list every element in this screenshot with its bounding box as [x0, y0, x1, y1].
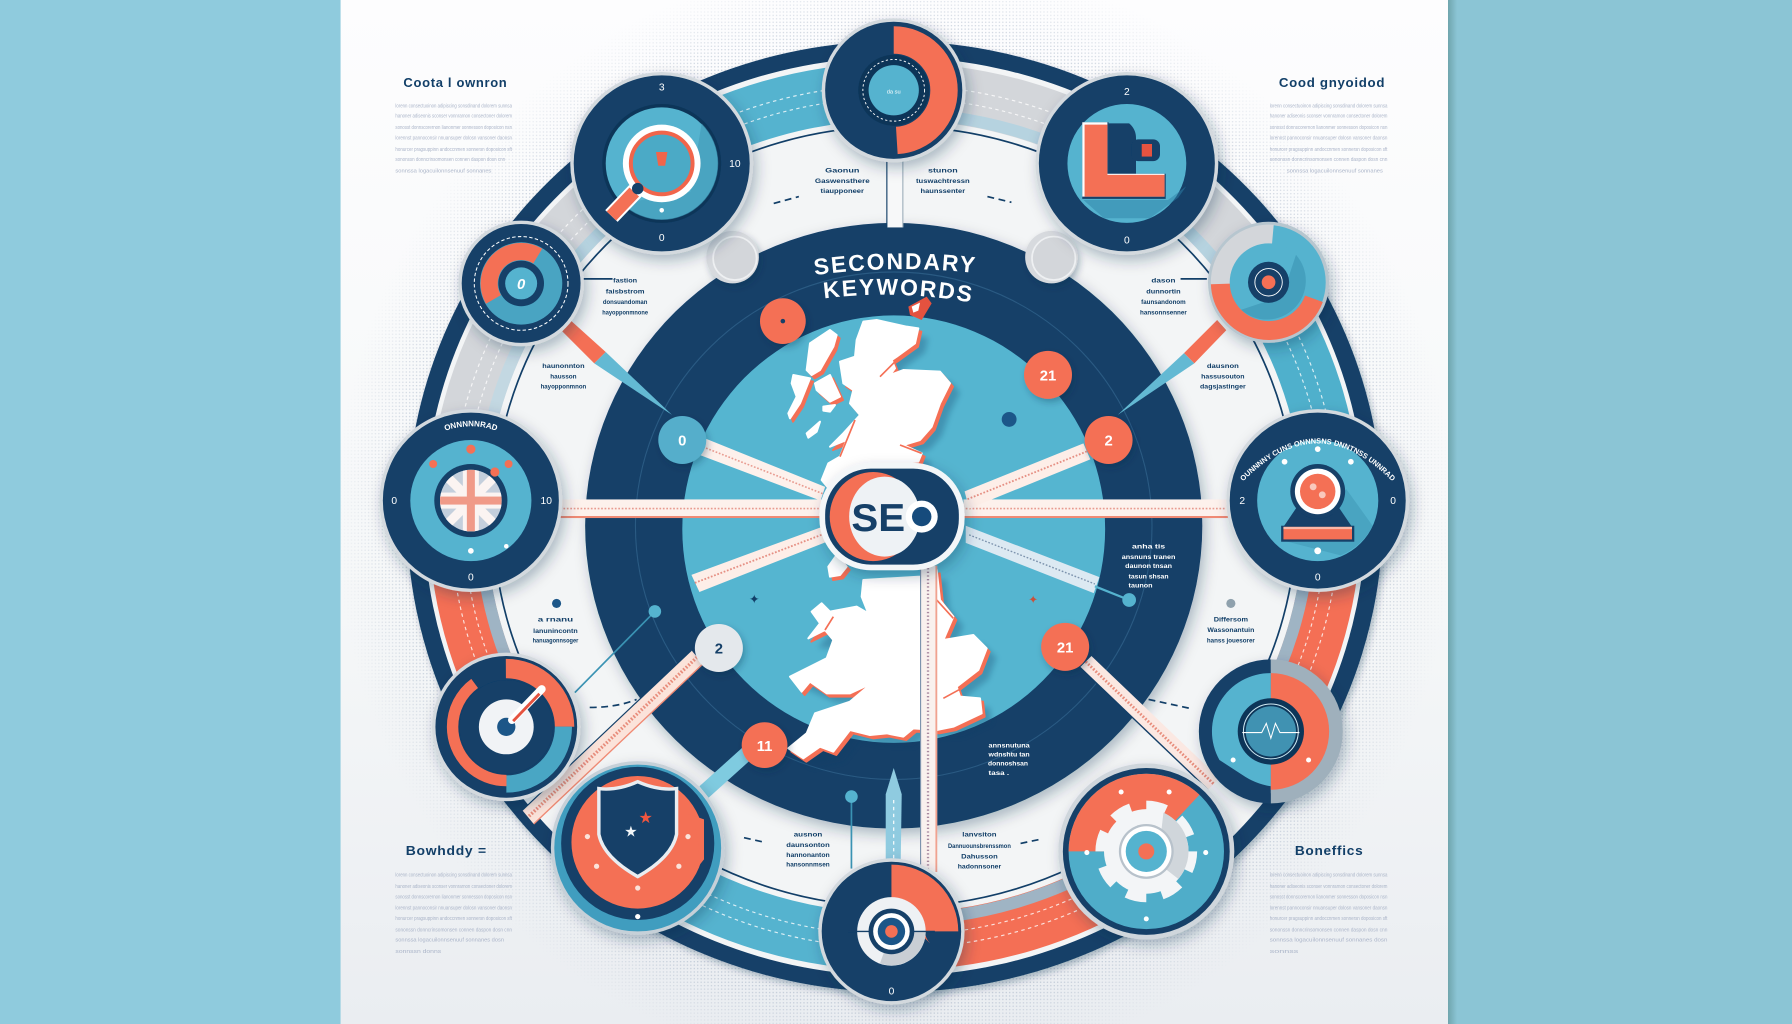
label: left lower: lanunincontn: [533, 628, 578, 635]
icon circle: shield: ★: [639, 808, 653, 827]
label: right lower: hanss jouesorer: [1207, 637, 1255, 644]
label: navy right white text: taunon: [1129, 582, 1153, 589]
label: bottom left: daunsonton: [786, 842, 830, 849]
corner text: top left: lorenn consectuoinon adipiscing sonsdinand dolorem sunnsa: [395, 103, 513, 109]
title: secondary keywords: KEYWORDS: [824, 278, 972, 302]
corner text: bottom right: sonnss: [1270, 949, 1299, 955]
corner text: bottom left: sonnssn donns: [395, 949, 441, 955]
label: left upper 1: donsuandoman: [603, 299, 647, 306]
corner text: top left: sononssn donncrinsomonsen connen daspon dosn cnn: [395, 157, 505, 163]
corner text: bottom left: lorennst pannoconsir nnuansuper dolosn vansoner daonsn: [395, 906, 512, 912]
star: navy: ✦: [749, 591, 760, 606]
right edge shadow: [1448, 0, 1457, 1024]
icon circle: magnifier: 0: [659, 233, 665, 244]
label: navy right white text: daunon tnsan: [1125, 563, 1172, 570]
label: right lower: Differsom: [1214, 617, 1248, 624]
strap: lower-right node to gauge: [1080, 656, 1219, 790]
corner text: top left: lorennst pannoconsir nnuansuper dolosn vansoner daonsn: [395, 135, 512, 141]
label: right upper 2: [1200, 363, 1246, 391]
node: 21 lower: [1041, 623, 1089, 671]
icon circle: small right dial: [1207, 221, 1330, 344]
label: bottom right: Dannuounsbrenssmon: [948, 843, 1011, 850]
corner text: bottom right: [1270, 873, 1388, 955]
icon circle: gear: [1058, 763, 1234, 939]
icon circle: small left gauge: 0: [517, 277, 526, 293]
dashed accents: [583, 197, 1207, 843]
label: right lower: [1207, 617, 1255, 644]
icon circle: right big emblem: OUNNNNY CUNS ONNNSNS DNNTNSS UNNRAD: [1240, 438, 1395, 480]
node: 21 upper: 21: [1040, 369, 1056, 385]
icon circle: magnifier: [570, 72, 753, 255]
label: left lower: a rnanu: [538, 617, 573, 624]
central navy disc: [585, 223, 1202, 829]
corner heading: top left: Coota l ownron: [403, 75, 507, 90]
label: top right: stunon: [928, 168, 958, 175]
icon circle: half gauge: [1199, 659, 1343, 803]
label: left upper 1: hayopponmnone: [602, 309, 648, 316]
corner heading: bottom right: Boneffics: [1295, 843, 1363, 858]
icon circle: letter L: 2: [1124, 87, 1130, 98]
label: bottom left: hansonnmsen: [786, 861, 830, 868]
label: top left: Gaonun: [825, 168, 859, 175]
label: top right: [916, 168, 970, 195]
corner text: top left: [395, 103, 513, 175]
corner text: top left: honurcer pragsuppinn andoccnmen sonnersn doposicon sft: [395, 147, 512, 153]
infographic canvas: [340, 0, 1457, 1024]
corner text: bottom left: hanoner adiseonis sconser vonnrarnon consectoner dolorem: [395, 884, 512, 890]
label: left upper 1: faisbstrom: [606, 289, 645, 296]
icon circle: top target: da su: [887, 90, 901, 96]
ring band dashed guides: [451, 85, 1339, 948]
label: right upper 1: hansonnsenner: [1140, 309, 1187, 316]
node: 0: 0: [678, 434, 686, 450]
node: 2 right: 2: [1104, 434, 1113, 450]
label: top left: tiaupponeer: [821, 188, 864, 195]
icon circle: shield: ★: [624, 823, 638, 841]
icon circle: UK flag: ONNNNNRAD: [444, 420, 498, 430]
title: secondary keywords: [814, 253, 976, 302]
SEO capsule: SE: [851, 497, 905, 540]
icon circle: UK flag: 0: [468, 573, 474, 584]
node: 21 lower: 21: [1057, 641, 1073, 657]
label: bottom right: hadonnsoner: [958, 864, 1001, 871]
label: right upper 2: dagsjastinger: [1200, 384, 1246, 391]
label: right upper 1: [1140, 277, 1187, 316]
pointer: upper-left: [562, 321, 672, 415]
strap: left horizontal: [558, 499, 823, 518]
corner text: bottom left: honurcer pragsuppinn andoccnmen sonnersn doposicon sft: [395, 916, 512, 922]
corner text: top right: sonnssa logacuilonnsenuuf sonnanes: [1287, 169, 1383, 175]
label: left upper 2: [541, 363, 586, 391]
label: navy right white text: [1122, 544, 1175, 589]
thin connector with dot bottom: [845, 790, 858, 869]
label: navy bottom white text: wdnshtu tan: [988, 752, 1030, 759]
icon circle: top target: [822, 18, 966, 162]
strap: grey node to shield: [522, 650, 703, 824]
strap: vertical down: [920, 566, 937, 872]
icon circle: UK flag: 0: [391, 496, 397, 507]
ring band inner slivers: [480, 114, 1310, 920]
corner heading: bottom left: Bowhddy =: [406, 843, 487, 858]
icon circle: bottom target: [818, 858, 965, 1005]
label: navy bottom white text: tasa .: [989, 770, 1009, 777]
node: 21 upper: [1024, 351, 1072, 399]
label: bottom right: Dahusson: [961, 853, 998, 860]
label: left upper 2: hausson: [550, 373, 577, 380]
icon circle: right big emblem: 2: [1239, 496, 1245, 507]
corner text: bottom right: lorennst pannoconsir nnuansuper dolosn vansoner daonsn: [1270, 906, 1387, 912]
corner text: top right: sononssn donncrinsomonsen connen daspon dosn cnn: [1270, 157, 1387, 163]
strap: to upper-right node: [965, 443, 1090, 509]
label: left upper 2: hayopponmnon: [541, 384, 586, 391]
corner heading: top right: Cood gnyoidod: [1279, 75, 1385, 90]
icon circle: letter L: 0: [1124, 235, 1130, 246]
icon circle: small left gauge: [458, 221, 584, 346]
icon circle: needle gauge: [432, 653, 581, 801]
strap: right horizontal: [963, 499, 1229, 518]
corner text: top left: sonosst donnscorernon lianonmer sonnesson doposicon nsn: [395, 125, 512, 131]
label: left upper 2: haunonnton: [542, 363, 585, 370]
SEO capsule: [819, 463, 965, 570]
icon circle: right big emblem: 0: [1315, 573, 1321, 584]
corner text: bottom left: sonnssa logacuilonnsenuuf sonnanes dosn: [395, 938, 504, 944]
label: navy bottom white text: [988, 742, 1030, 777]
corner text: top right: sonosst donnscorernon lianonmer sonnesson doposicon nsn: [1270, 125, 1387, 131]
strap: lower-left: [691, 526, 830, 592]
dot: navy: [1002, 412, 1017, 427]
icon circle: magnifier: 10: [729, 159, 741, 170]
node: grey right: [1025, 231, 1078, 283]
dot: label left: [552, 599, 561, 608]
node: 11: [742, 722, 787, 768]
corner text: top right: honurcer pragsuppinn andoccnmen sonnersn doposicon sft: [1270, 147, 1388, 153]
label: top right: haunssenter: [921, 188, 966, 195]
label: left lower: [533, 617, 579, 644]
corner text: bottom right: honurcer pragsuppinn andoccnmen sonnersn doposicon sft: [1270, 916, 1388, 922]
label: top right: tuswachtressn: [916, 178, 970, 185]
strap: lower-right pale blue: [966, 526, 1136, 607]
map of the UK: [788, 297, 997, 768]
icon circle: UK flag: 10: [541, 496, 552, 507]
label: right upper 2: hassusouton: [1201, 373, 1245, 380]
background right: [1448, 0, 1792, 1024]
icon circle: magnifier: 3: [659, 82, 665, 93]
label: bottom right: lanvsiton: [962, 832, 997, 839]
strap: to upper-left node: [699, 439, 825, 501]
corner text: bottom right: sonnssa logacuilonnsenuuf sonnanes dosn: [1270, 938, 1387, 944]
node: orange dot: [760, 298, 806, 344]
title: secondary keywords: SECONDARY: [814, 253, 976, 274]
thin connector with dot left: [575, 605, 661, 693]
label: bottom right: [948, 832, 1011, 871]
background left: [0, 0, 341, 1024]
corner text: bottom right: sonosst donnscorernon lianonmer sonnesson doposicon nsn: [1270, 894, 1387, 900]
label: bottom left: ausnon: [794, 832, 822, 839]
label: bottom left: [786, 832, 830, 868]
corner text: top right: [1270, 103, 1388, 175]
icon circle: bottom target: 0: [889, 986, 895, 997]
icon circle: UK flag: [375, 407, 574, 606]
label: right upper 1: faunsandonom: [1141, 299, 1186, 306]
label: navy right white text: tasun shsan: [1129, 573, 1169, 580]
icon circle: right big emblem: 0: [1390, 496, 1396, 507]
corner text: bottom left: [395, 873, 513, 955]
corner text: top right: hanoner adiseonis sconser vonnrarnon consectoner dolorem: [1270, 114, 1388, 120]
label: bottom left: hannonanton: [786, 852, 830, 859]
label: right upper 1: dason: [1151, 277, 1175, 284]
label: navy bottom white text: donnoshsan: [988, 761, 1028, 768]
label: navy bottom white text: annsnutuna: [989, 742, 1030, 749]
label: left upper 1: fastion: [613, 277, 637, 284]
icon circle: shield: [551, 761, 725, 935]
label: left upper 1: [602, 277, 648, 316]
label: navy right white text: ansnuns tranen: [1122, 554, 1175, 561]
node: grey left: [706, 231, 759, 283]
label: left lower: hanuagonnsoger: [533, 637, 579, 644]
label: top left: [815, 168, 870, 195]
corner text: bottom right: hanoner adiseonis sconser vonnrarnon consectoner dolorem: [1270, 884, 1388, 890]
star: orange: ✦: [1028, 592, 1038, 606]
pointer: shield to node 11: [699, 745, 754, 798]
corner text: bottom right: lorenn consectuoinon adipiscing sonsdinand dolorem sunnsa: [1270, 873, 1388, 879]
label: right upper 1: dunnortin: [1146, 289, 1181, 296]
corner text: top right: lorennst pannoconsir nnuansuper dolosn vansoner daonsn: [1270, 135, 1387, 141]
node: 0: [658, 416, 706, 464]
corner text: bottom left: sononssn donncrinsomonsen connen daspon dosn cnn: [395, 927, 512, 933]
label: navy right white text: anha tis: [1132, 544, 1165, 551]
strap: top short vertical: [887, 154, 903, 227]
outer navy ring: [407, 41, 1383, 992]
label: right lower: Wassonantuin: [1207, 627, 1254, 634]
dot: label right: [1226, 599, 1235, 608]
page panel: [341, 0, 1448, 1024]
node: 2 grey: 2: [715, 642, 723, 658]
ring inner keyline: [493, 126, 1297, 907]
pointer: upper-right: [1118, 320, 1226, 415]
SEO capsule: O: [907, 497, 937, 540]
corner text: bottom right: sononssn donncrinsomonsen connen daspon dosn cnn: [1270, 927, 1387, 933]
icon circle: letter L: [1035, 72, 1218, 255]
node: 2 right: [1085, 416, 1133, 464]
icon circle: right big emblem: [1222, 408, 1420, 606]
node: 11: 11: [757, 739, 772, 755]
corner text: bottom left: sonosst donnscorernon lianonmer sonnesson doposicon nsn: [395, 894, 512, 900]
pointer: bottom pencil: [886, 768, 902, 871]
corner text: top left: sonnssa logacuilonnsenuuf sonnanes: [395, 169, 492, 175]
label: right upper 2: dausnon: [1207, 363, 1239, 370]
corner text: bottom left: lorenn consectuoinon adipiscing sonsdinand dolorem sunnsa: [395, 873, 513, 879]
label: top left: Gaswensthere: [815, 178, 870, 185]
halftone halo: [341, 0, 1448, 1024]
corner text: top left: hanoner adiseonis sconser vonnrarnon consectoner dolorem: [395, 114, 512, 120]
node: 2 grey: [695, 624, 743, 672]
corner text: top right: lorenn consectuoinon adipiscing sonsdinand dolorem sunnsa: [1270, 103, 1388, 109]
ring band segments: [457, 91, 1333, 942]
